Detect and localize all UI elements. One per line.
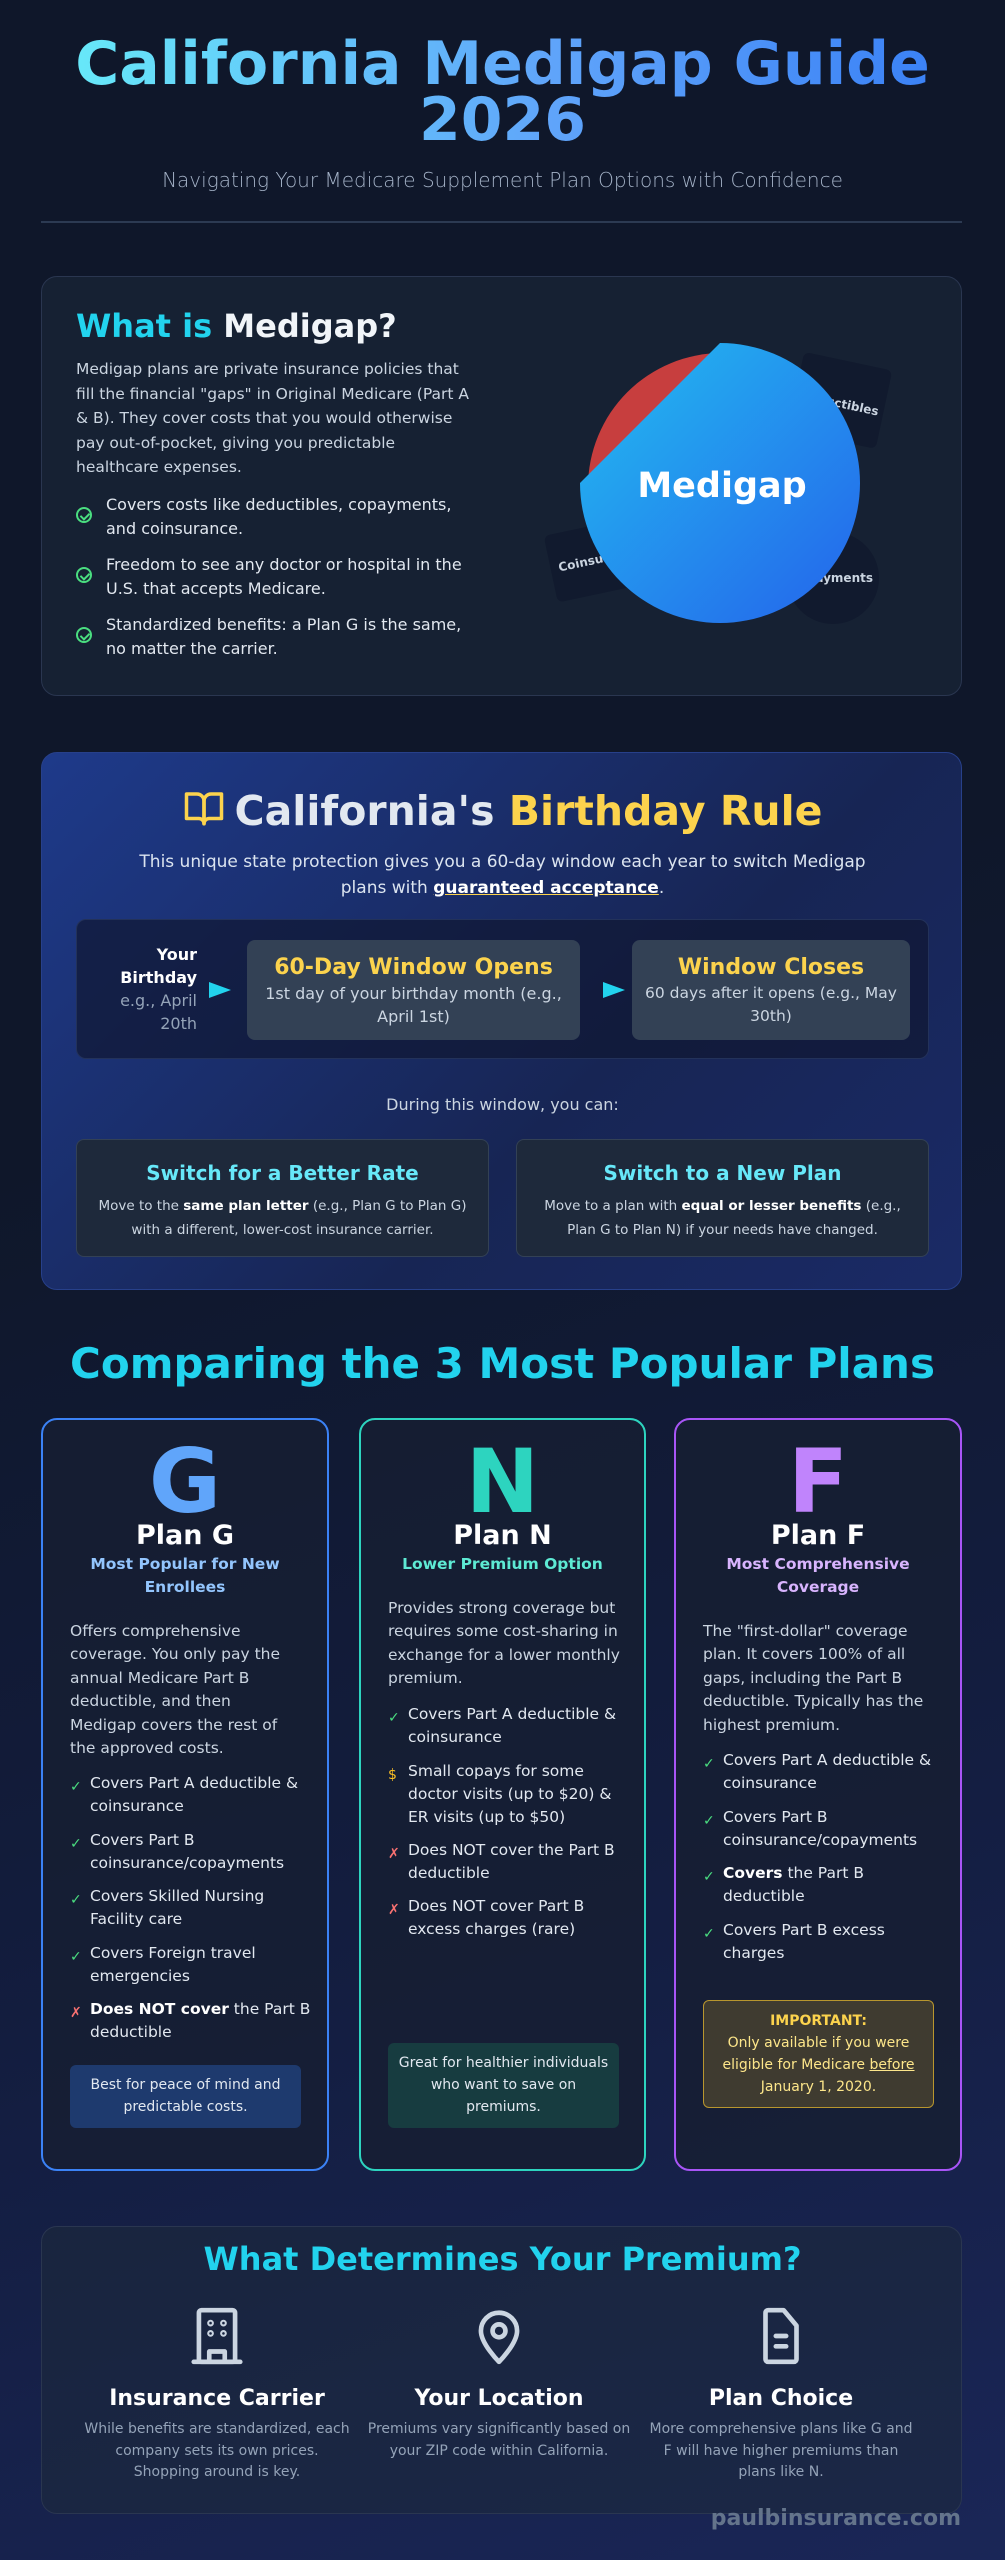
card: plan G: ✓ bbox=[70, 1779, 82, 1795]
arrow bbox=[209, 982, 231, 998]
option: better rate: Switch for a Better Rate bbox=[146, 1161, 419, 1185]
factor: plan choice bbox=[650, 2308, 912, 2480]
card: plan N: ✗ bbox=[388, 1846, 400, 1862]
window opens bbox=[247, 940, 580, 1040]
callout bbox=[388, 2043, 619, 2128]
card: plan N: Small copays for some doctor visits (up to $20) & ER visits (up to $50) bbox=[408, 1762, 611, 1826]
important callout bbox=[703, 2000, 934, 2108]
window closes: Window Closes bbox=[678, 955, 864, 980]
card: plan F: ✓ bbox=[703, 1813, 715, 1829]
card: plan G: Covers Skilled Nursing Facility care bbox=[90, 1887, 264, 1928]
card: plan G: Offers comprehensive coverage. You only pay the annual Medicare Part B deductible, and then Medigap covers the rest of the approved costs. bbox=[70, 1622, 280, 1757]
bullet list: Freedom to see any doctor or hospital in the U.S. that accepts Medicare. bbox=[106, 555, 462, 598]
panel: premium factors bbox=[41, 2226, 962, 2514]
factor: location: Premiums vary significantly based on your ZIP code within California. bbox=[368, 2421, 630, 2458]
card: plan G: Covers Part A deductible & coinsurance bbox=[90, 1774, 298, 1815]
window opens: 60-Day Window Opens bbox=[274, 955, 553, 980]
factor: carrier: Insurance Carrier bbox=[109, 2386, 325, 2411]
your birthday: 20th bbox=[160, 1014, 197, 1033]
card: plan N: Does NOT cover the Part B deductible bbox=[408, 1841, 615, 1882]
option: new plan: Move to a plan with equal or lesser benefits (e.g., Plan G to Plan N) if your needs have changed. bbox=[544, 1198, 901, 1238]
card: plan N: Lower Premium Option bbox=[402, 1555, 603, 1573]
timeline bbox=[76, 919, 929, 1059]
card: plan F: Plan F bbox=[771, 1520, 865, 1551]
option: new plan: Switch to a New Plan bbox=[603, 1161, 842, 1185]
factor: plan choice: Plan Choice bbox=[709, 2386, 853, 2411]
card: plan N: Does NOT cover Part B excess charges (rare) bbox=[408, 1897, 584, 1938]
card: plan G: Plan G bbox=[136, 1520, 234, 1551]
your birthday bbox=[120, 945, 197, 1033]
window closes bbox=[632, 940, 910, 1040]
card: plan F: F bbox=[788, 1430, 848, 1533]
panel: what is medigap bbox=[41, 276, 962, 696]
factor: location bbox=[368, 2310, 630, 2458]
title: California Medigap Guide bbox=[75, 29, 930, 99]
arrow bbox=[603, 982, 625, 998]
card: plan G: ✓ bbox=[70, 1892, 82, 1908]
callout: Best for peace of mind and predictable costs. bbox=[90, 2077, 280, 2115]
footer brand: paulbinsurance.com bbox=[711, 2506, 961, 2531]
card: plan N: ✓ bbox=[388, 1710, 400, 1726]
bullet list: Standardized benefits: a Plan G is the same, no matter the carrier. bbox=[106, 615, 461, 658]
card: plan F: ✓ bbox=[703, 1756, 715, 1772]
heading: comparing plans: Comparing the 3 Most Popular Plans bbox=[70, 1339, 935, 1388]
important callout: IMPORTANT: bbox=[770, 2013, 867, 2029]
card: plan F: Covers Part A deductible & coinsurance bbox=[723, 1751, 931, 1792]
factor: carrier: While benefits are standardized, each company sets its own prices. Shopping around is key. bbox=[84, 2421, 350, 2480]
callout bbox=[70, 2065, 301, 2128]
chart: medigap pie bbox=[557, 343, 880, 623]
window closes: 60 days after it opens (e.g., May 30th) bbox=[645, 984, 897, 1025]
chart: medigap pie: Deductibles bbox=[799, 388, 880, 419]
subtitle: Navigating Your Medicare Supplement Plan Options with Confidence bbox=[162, 168, 843, 192]
heading with book icon: California's Birthday Rule bbox=[235, 787, 822, 835]
card: plan N: N bbox=[466, 1430, 539, 1533]
card: plan F: Covers the Part B deductible bbox=[723, 1864, 864, 1905]
card: plan G: ✗ bbox=[70, 2005, 82, 2021]
card: plan F: ✓ bbox=[703, 1869, 715, 1885]
panel: birthday rule bbox=[41, 752, 962, 1290]
title: 2026 bbox=[419, 85, 586, 155]
card: plan F: Covers Part B coinsurance/copayments bbox=[723, 1808, 917, 1849]
factor: carrier bbox=[84, 2308, 350, 2480]
option: new plan bbox=[516, 1139, 929, 1257]
card: plan N bbox=[359, 1418, 646, 2171]
card: plan G: G bbox=[149, 1430, 221, 1533]
factor: location: Your Location bbox=[414, 2386, 584, 2411]
card: plan N: $ bbox=[388, 1767, 397, 1783]
bullet list bbox=[76, 495, 462, 658]
factor: plan choice: More comprehensive plans like G and F will have higher premiums than plans like N. bbox=[650, 2421, 912, 2480]
your birthday: Your bbox=[157, 945, 197, 964]
option: better rate bbox=[76, 1139, 489, 1257]
card: plan G: Does NOT cover the Part B deductible bbox=[90, 2000, 310, 2041]
card: plan G: Covers Part B coinsurance/copayments bbox=[90, 1831, 284, 1872]
title bbox=[75, 29, 930, 155]
paragraph: Medigap plans are private insurance policies that fill the financial "gaps" in Original Medicare (Part A & B). They cover costs that you would otherwise pay out-of-pocket, giving you predictable healthcare expenses. bbox=[76, 360, 469, 476]
chart: medigap pie: Copayments bbox=[790, 571, 873, 585]
card: plan F: The "first-dollar" coverage plan. It covers 100% of all gaps, including the Part B deductible. Typically has the highest premium. bbox=[703, 1622, 923, 1734]
card: plan G: Most Popular for New Enrollees bbox=[90, 1555, 280, 1596]
card: plan F: Covers Part B excess charges bbox=[723, 1921, 885, 1962]
callout: Great for healthier individuals who want to save on premiums. bbox=[399, 2055, 608, 2115]
card: plan F: ✓ bbox=[703, 1926, 715, 1942]
during text: During this window, you can: bbox=[386, 1095, 619, 1114]
heading: What is Medigap? bbox=[76, 307, 397, 345]
chart: medigap pie: Medigap bbox=[637, 466, 807, 506]
chart: medigap pie: Coinsurance bbox=[557, 543, 641, 574]
card: plan F: Most Comprehensive Coverage bbox=[726, 1555, 910, 1596]
card: plan G: Covers Foreign travel emergencies bbox=[90, 1944, 256, 1985]
card: plan N: Provides strong coverage but requires some cost-sharing in exchange for a lower monthly premium. bbox=[388, 1599, 620, 1687]
card: plan F bbox=[674, 1418, 962, 2171]
card: plan G: ✓ bbox=[70, 1949, 82, 1965]
bullet list: Covers costs like deductibles, copayments, and coinsurance. bbox=[106, 495, 451, 538]
your birthday: e.g., April bbox=[120, 991, 197, 1010]
your birthday: Birthday bbox=[120, 968, 197, 987]
card: plan N: Plan N bbox=[453, 1520, 552, 1551]
window opens: 1st day of your birthday month (e.g., April 1st) bbox=[265, 984, 562, 1026]
important callout: Only available if you were eligible for Medicare before January 1, 2020. bbox=[722, 2035, 915, 2095]
card: plan G: ✓ bbox=[70, 1836, 82, 1852]
card: plan G bbox=[41, 1418, 329, 2171]
intro text: This unique state protection gives you a 60-day window each year to switch Medigap plans with guaranteed acceptance. bbox=[139, 852, 866, 898]
option: better rate: Move to the same plan letter (e.g., Plan G to Plan G) with a different, lower-cost insurance carrier. bbox=[98, 1198, 467, 1238]
card: plan N: Covers Part A deductible & coinsurance bbox=[408, 1705, 616, 1746]
heading: What Determines Your Premium? bbox=[204, 2240, 802, 2278]
card: plan N: ✗ bbox=[388, 1902, 400, 1918]
